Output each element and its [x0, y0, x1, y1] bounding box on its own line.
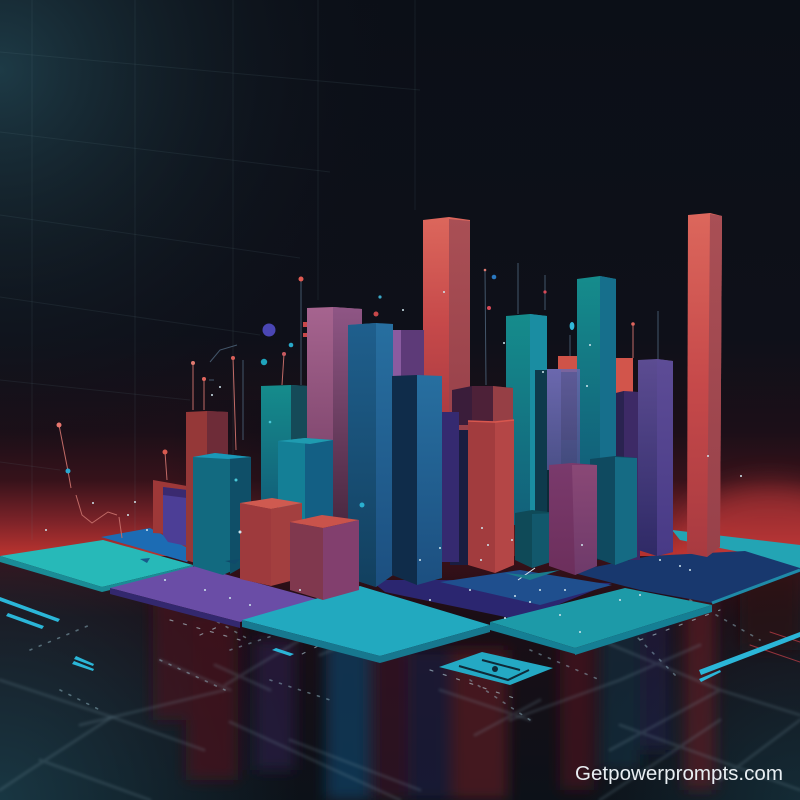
tile: cyan right back: [672, 530, 800, 570]
bar: tall coral center: [423, 217, 470, 430]
tile: blue center: [440, 570, 612, 605]
bar: small purple far-left: [163, 487, 187, 546]
tile: blue back-left: [101, 528, 195, 562]
bar: small red right: [616, 358, 633, 394]
dark filler behind bars: [450, 420, 640, 565]
bar: purple right: [638, 359, 673, 556]
particle stalks and markers: [56, 263, 658, 538]
bar: plum front cube: [290, 515, 359, 600]
tile: purple left: [110, 566, 320, 628]
tile: teal right: [490, 588, 712, 655]
scattered white specks: [45, 291, 742, 633]
bar: teal mid: [278, 438, 333, 520]
bars: front center group: [392, 213, 722, 585]
tile: cyan far-left: [0, 540, 193, 592]
bar: purple small right: [616, 391, 640, 560]
bar: blue large: [348, 323, 393, 587]
floor circuit lines: [0, 600, 800, 800]
bar: teal tall center: [506, 314, 547, 525]
bars: back row: [393, 217, 673, 565]
bar: plum tall: [549, 463, 597, 575]
bar: far-right coral tower: [687, 213, 722, 557]
bar: purple behind blue: [393, 330, 424, 382]
bar: small red far-left: [153, 480, 187, 535]
tile: dark purple center: [370, 580, 612, 620]
bar reflections: [153, 570, 800, 800]
bar: purple narrow: [442, 412, 459, 562]
bar: dark maroon: [452, 386, 513, 425]
floor icon: cyan chip: [439, 652, 553, 685]
bar: lavender: [535, 369, 580, 520]
bar: teal front left: [193, 453, 251, 575]
dark debris and shard: [140, 558, 560, 580]
bar: teal tallest right: [577, 276, 616, 470]
tile: dark blue right: [570, 551, 800, 603]
bar: dark teal small: [515, 510, 557, 568]
bar: navy: [392, 375, 442, 585]
bar: teal back left: [261, 385, 308, 505]
cyan floor streaks: [0, 597, 800, 682]
bar: teal front right: [590, 456, 637, 565]
watermark text: Getpowerprompts.com: [575, 763, 783, 785]
bar: mauve: [307, 307, 362, 525]
bar: red front cube: [240, 498, 302, 586]
tile: cyan center: [242, 586, 490, 663]
bar: red tall left: [186, 411, 228, 563]
platform tiles: [0, 528, 800, 663]
reflective floor: [0, 556, 800, 800]
bar: red front center: [468, 420, 514, 573]
bar: small red back: [558, 356, 577, 372]
bars: left group: [153, 307, 393, 600]
wall grid lines: [0, 0, 420, 540]
